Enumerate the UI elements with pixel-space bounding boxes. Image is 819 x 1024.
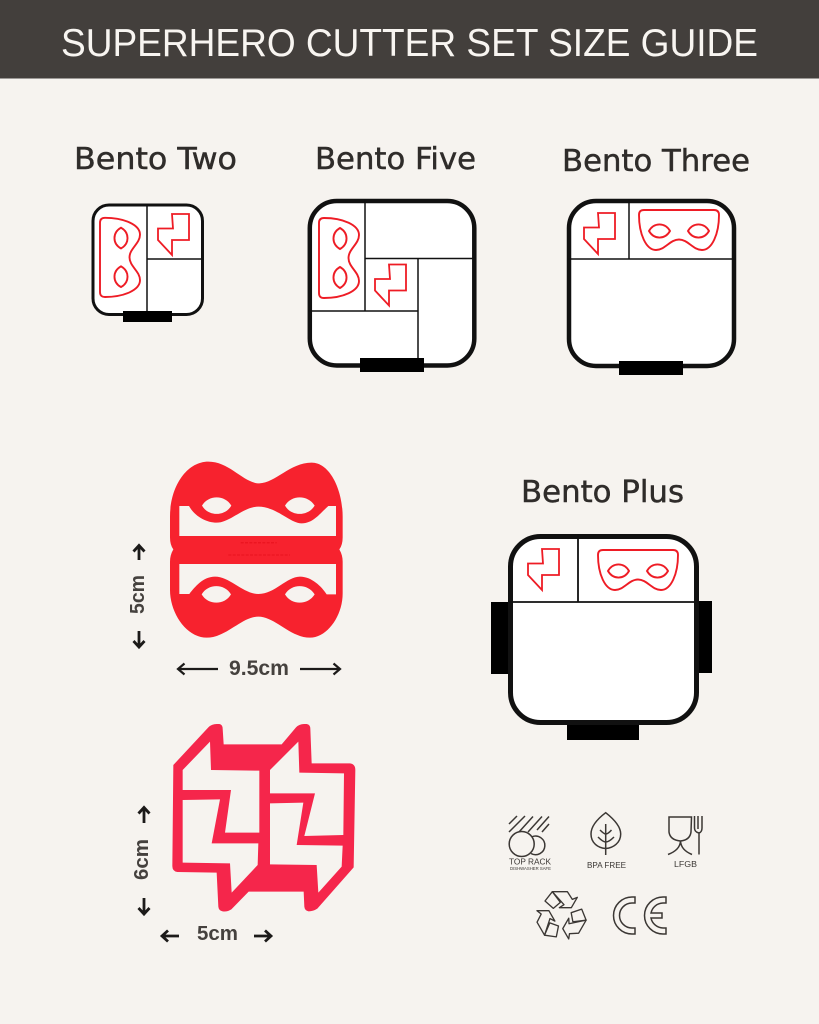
dimension: bolt height [138,808,150,914]
icon: LFGB glass and fork [668,816,702,869]
heading: Bento Plus: Bento Plus [521,475,684,510]
arrow: down [134,631,144,647]
label: dishwasher safe: DISHWASHER SAFE [510,866,551,871]
bolt outline [158,214,189,255]
icon: recycling symbol [532,892,590,942]
icon: BPA free leaf [587,813,626,870]
mask outline [319,218,359,298]
arrow: right [254,930,271,942]
icon: CE mark [614,897,666,934]
arrow: left [178,664,218,674]
dimension: mask height [134,546,144,647]
dimension: mask width [178,664,340,674]
mask outline [639,210,719,250]
label: LFGB: LFGB [674,859,697,869]
icon: top rack dishwasher safe [509,816,551,871]
heading: Bento Three: Bento Three [562,144,750,179]
arrow: right [300,664,340,674]
label: 5cm: 5cm [127,575,149,614]
dimension: bolt width [162,930,271,942]
label: 5cm: 5cm [197,923,238,945]
bolt outline [375,264,406,306]
red mask cutter photo [170,462,343,638]
diagram: Bento Two lunchbox [93,204,203,322]
heading: Bento Two: Bento Two [74,142,237,177]
arrow: up [138,808,150,823]
diagram: Bento Five lunchbox [308,199,476,372]
mask outline [100,218,140,297]
mask outline [598,550,678,590]
arrow: up [134,546,144,560]
title: SUPERHERO CUTTER SET SIZE GUIDE [61,22,758,65]
label: top rack: TOP RACK [509,856,551,866]
arrow: left [162,930,179,942]
diagram: Bento Three lunchbox [567,199,736,375]
bolt outline [584,213,615,254]
arrow: down [138,898,150,914]
label: 9.5cm: 9.5cm [229,657,289,680]
bolt outline [528,549,559,590]
label: BPA free: BPA FREE [587,861,626,870]
diagram: Bento Plus lunchbox [491,534,712,740]
label: 6cm: 6cm [131,839,153,880]
header banner [0,0,819,78]
red lightning bolt cutter photo [172,724,355,911]
heading: Bento Five: Bento Five [315,142,476,177]
